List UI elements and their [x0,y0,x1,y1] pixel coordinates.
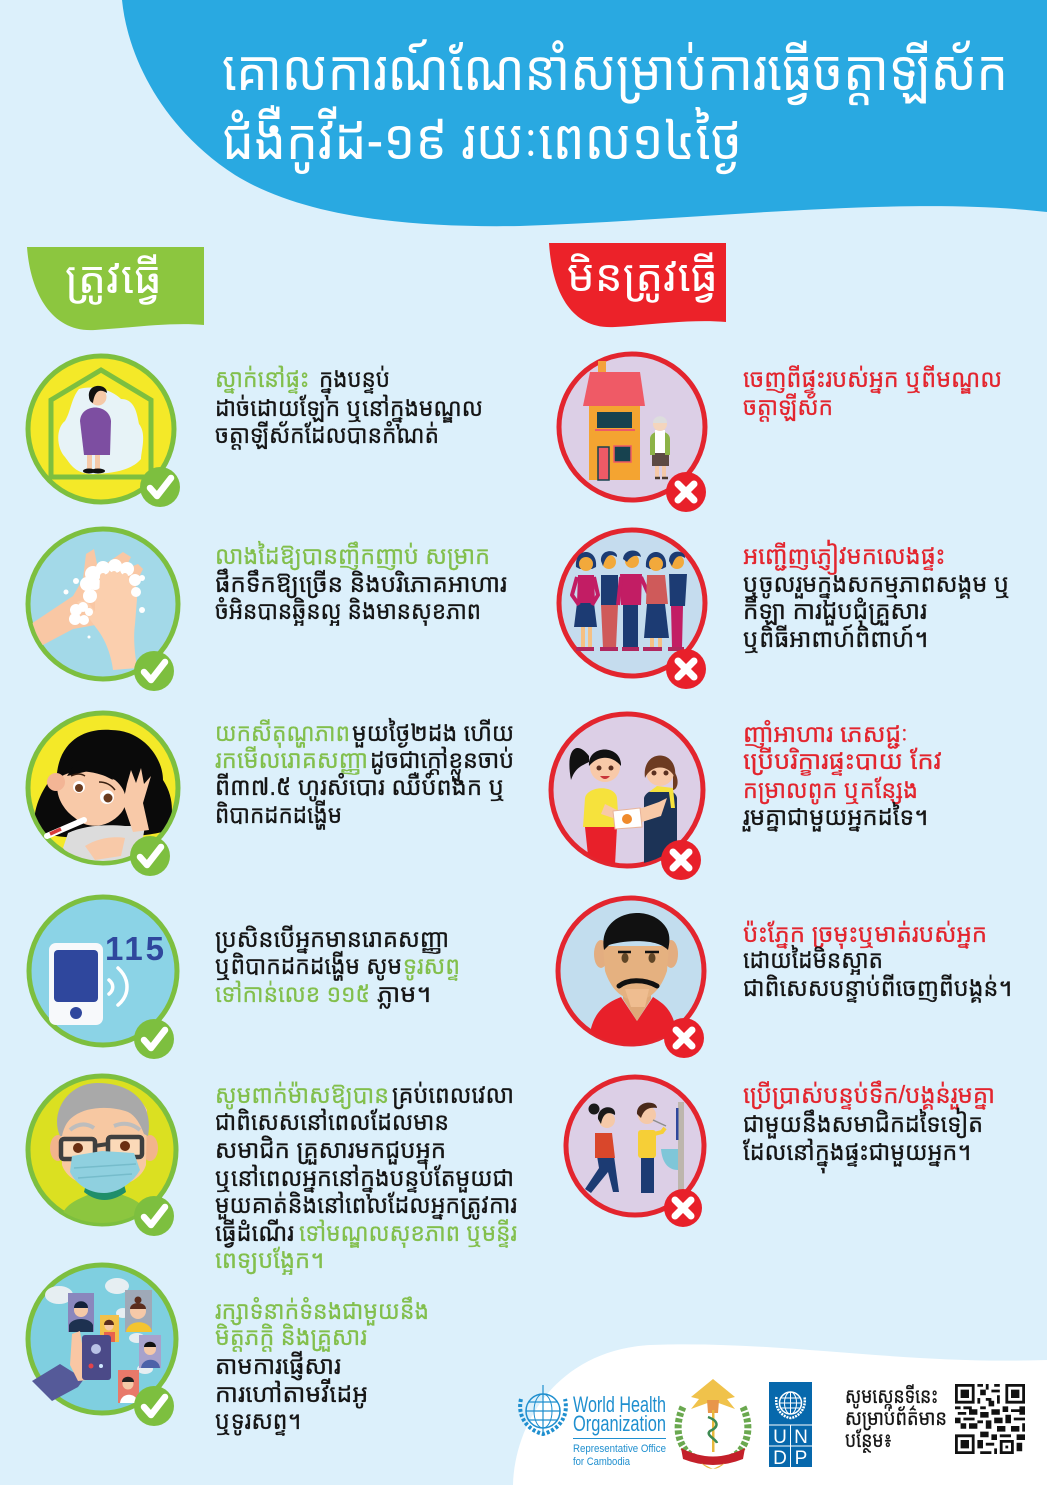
text block: ចត្តាឡីស័ក [743,392,833,423]
text block: ស្នាក់នៅផ្ទះ [215,365,309,395]
icon: cross badge [664,1189,702,1227]
text block [743,539,1010,653]
text block: ការហៅតាមវីដេអូ [215,1378,368,1410]
text block: ដាច់ដោយឡែក ឬនៅក្នុងមណ្ឌល [215,394,483,430]
text block: ប្រើបរិក្ខារផ្ទះបាយ កែវ [743,746,942,777]
header banner [122,0,1047,226]
panel: do 6 keep in touch [28,1265,429,1437]
panel: do 5 wear mask [28,1076,517,1276]
text block: រកមើលរោគសញ្ញា [215,745,368,776]
icon: check badge [130,836,170,876]
text block: អញ្ជើញភ្ញៀវមកលេងផ្ទះ [743,539,945,575]
icon: girl with thermometer [28,713,178,863]
text: scan for more information: បន្ថែម៖ [845,1429,892,1454]
icon: group of people [559,530,705,676]
panel: don't 2 invite guests [559,530,1010,689]
text block: តាមការផ្ញើសារ [215,1349,341,1381]
text block: ដែលនៅក្នុងផ្ទះជាមួយអ្នក។ [743,1138,971,1174]
panel: don't 4 touch face [558,898,1012,1058]
text block: ភ្លាម។ [377,980,431,1010]
text block [215,365,483,451]
logo: WHO: Representative Office [573,1443,666,1455]
text block: ប្រើប្រាស់បន្ទប់ទឹក/បង្គន់រួមគ្នា [743,1079,995,1111]
text block: ប៉ះភ្នែក ច្រមុះឬមាត់របស់អ្នក [743,920,987,950]
icon: woman in house [28,356,174,502]
text block: ពី៣៧.៥ ហូរសំបោរ ឈឺបំពង់ក ឬ [215,771,505,803]
text block [215,1295,429,1437]
text block [743,364,1002,423]
text block: ចេញពីផ្ទះរបស់អ្នក ឬពីមណ្ឌល [743,364,1002,395]
icon: phone 115 [29,897,177,1045]
text block: ឬនៅពេលអ្នកនៅក្នុងបន្ទប់តែមួយជា [215,1164,514,1200]
text block: ផឹកទឹកឱ្យច្រើន និងបរិភោគអាហារ [215,566,507,599]
text block: ពិបាកដកដង្ហើម [215,798,342,831]
text: scan for more information: សូមស្កេនទីនេះ [845,1385,938,1410]
text block: ពេទ្យបង្អែក។ [215,1246,324,1276]
icon: man touching face [558,898,704,1046]
icon: shared bathroom [566,1077,704,1215]
logo: WHO: World Health [573,1392,666,1417]
don't heading tag [549,243,726,327]
text block: ជាពិសេសបន្ទាប់ពីចេញពីបង្គន់។ [743,973,1012,1004]
text block: មិត្តភក្តិ និងគ្រួសារ [215,1323,367,1353]
text block [743,920,1012,1004]
logo: WHO: for Cambodia [573,1456,631,1468]
icon: cross badge [664,1018,704,1058]
icon: cross badge [666,649,706,689]
icon: washing hands [28,529,178,679]
panel: do 3 take temperature [28,713,514,876]
text block [215,539,507,627]
text block: ជាពិសេសនៅពេលដែលមាន [215,1108,449,1136]
panel: don't 1 leave home [559,354,1002,512]
panel: don't 5 shared bathroom [566,1077,995,1227]
text block: សូមពាក់ម៉ាសឱ្យបាន [215,1081,389,1111]
text block: ឬទូរសព្ទ។ [215,1407,301,1437]
logo: UNDP: N [794,1427,808,1448]
icon: cross badge [661,840,701,880]
text block: ប្រសិនបើអ្នកមានរោគសញ្ញា [215,924,449,955]
logo: UNDP [769,1382,812,1469]
QR code [955,1384,1025,1454]
logo: WHO [520,1385,666,1468]
panel: don't 3 share food [551,714,942,880]
text block: គ្រប់ពេលវេលា [392,1081,514,1110]
text: scan for more information [845,1385,947,1454]
logo: UNDP: U [773,1427,787,1448]
logo: WHO: Organization [573,1411,666,1436]
icon: check badge [134,1196,174,1236]
text block: ជាមួយនឹងសមាជិកដទៃទៀត [743,1107,983,1139]
text block [215,924,460,1010]
text block: ឬពិបាកដកដង្ហើម សូម [215,949,402,982]
text block: លាងដៃឱ្យបានញឹកញាប់ សម្រាក [215,539,490,571]
panel: do 1 stay home [28,356,483,507]
text block: កីឡា ការជួបជុំគ្រួសារ [743,596,927,627]
do heading tag [27,247,204,330]
text block: យកសីតុណ្ហភាព [215,718,350,749]
text block: ដោយដៃមិនស្អាត [743,943,883,976]
text block: ចំអិនបានឆ្អិនល្អ និងមានសុខភាព [215,596,481,627]
icon: two girls sharing food [551,714,703,866]
icon: check badge [134,651,174,691]
text block [215,1081,517,1276]
icon: house and old woman [559,354,705,500]
title: ជំងឺកូវីដ-១៩ រយៈពេល១៤ថ្ងៃ [222,104,742,174]
icon: man with mask [28,1076,176,1230]
icon: check badge [140,467,180,507]
icon: cross badge [666,472,706,512]
text block: ឬចូលរួមក្នុងសកម្មភាពសង្គម ឬ [743,570,1010,606]
text block: មួយគាត់និងនៅពេលដែលអ្នកត្រូវការ [215,1191,517,1221]
text block: រួមគ្នាជាមួយអ្នកដទៃ។ [742,800,928,833]
icon: check badge [134,1019,174,1059]
text block: ទៅកាន់លេខ ១១៥ [215,980,370,1008]
text: scan for more information: សម្រាប់ព័ត៌មាន [845,1407,947,1431]
icon: video calling [28,1265,176,1413]
footer panel [513,1344,1047,1485]
title [222,39,1008,174]
text block: ទូរសព្ទ [403,952,460,982]
text block: កម្រាលពូក ឬកន្សែង [743,776,918,806]
panel: do 4 call 115 [29,897,460,1059]
text block [743,1079,995,1174]
text block: ទៅមណ្ឌលសុខភាព ឬមន្ទីរ [299,1218,517,1249]
text block: ដូចជាក្តៅខ្លួនចាប់ [370,746,514,781]
text block: ញាំអាហារ ភេសជ្ជៈ [743,719,908,750]
text block: ចត្តាឡីស័កដែលបានកំណត់ [215,420,439,451]
text block: រក្សាទំនាក់ទំនងជាមួយនឹង [215,1295,429,1326]
text block [215,716,514,831]
icon: phone 115: 115 [105,930,164,967]
text block: មួយថ្ងៃ២ដង ហើយ [352,716,514,749]
logo: UNDP: D [773,1448,787,1469]
logo: Ministry of Health emblem [678,1379,748,1469]
logo: UNDP: P [795,1448,807,1469]
do heading tag: ត្រូវធ្វើ [65,254,162,305]
don't heading tag: មិនត្រូវធ្វើ [567,252,718,303]
icon: check badge [134,1386,174,1426]
text block: ក្នុងបន្ទប់ [319,365,390,401]
text block: សមាជិក គ្រួសារមកជួបអ្នក [215,1134,446,1166]
panel: do 2 wash hands [28,529,507,691]
text block: ឬពិធីអាពាហ៍ពិពាហ៍។ [743,623,928,653]
text block [742,719,942,833]
text block: ធ្វើដំណើរ [215,1218,294,1249]
